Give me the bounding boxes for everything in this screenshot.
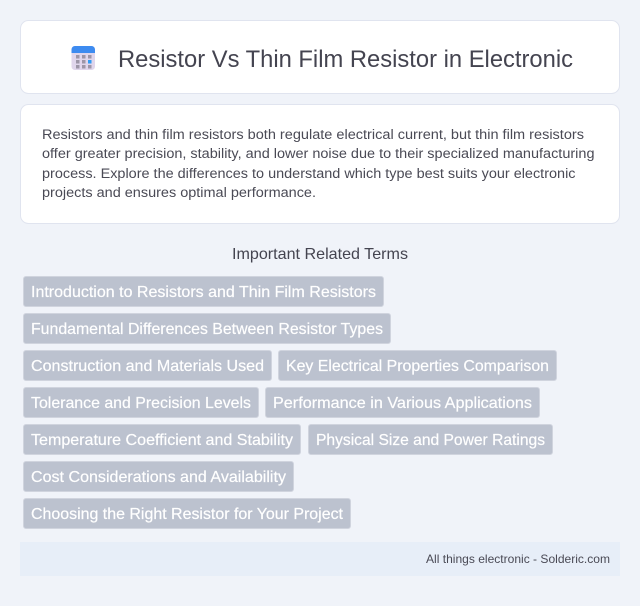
chip: electrical properties [278,350,556,380]
summary text: Resistors and thin film resistors both regulate electrical current, but thin film resistors [42,127,584,143]
chip: tolerance [24,388,258,418]
chip: cost [24,462,294,492]
chip: construction [24,350,272,380]
chip: construction: Construction and Materials Used [31,358,264,375]
term chips [24,276,556,528]
summary text: process. Explore the differences to understand which type best suits your electronic [42,166,576,182]
chip: cost: Cost Considerations and Availability [31,469,286,486]
chip: choosing: Choosing the Right Resistor for Your Project [31,506,344,523]
chip: performance: Performance in Various Applications [273,395,532,412]
chip: introduction: Introduction to Resistors and Thin Film Resistors [31,284,376,301]
summary text: projects and ensures optimal performance. [42,185,316,201]
panel: summary [20,104,620,224]
footer: All things electronic - Solderic.com [426,552,610,566]
chip: temperature: Temperature Coefficient and Stability [31,432,293,449]
chip: size [308,424,552,454]
title: Resistor Vs Thin Film Resistor in Electronic [118,46,573,73]
footer [20,542,620,576]
heading: related terms: Important Related Terms [232,246,408,263]
chip: tolerance: Tolerance and Precision Levels [31,395,251,412]
chip: electrical properties: Key Electrical Properties Comparison [286,358,549,375]
chip: fundamental differences [24,314,390,344]
panel: header [20,20,620,94]
chip: introduction [24,276,384,306]
chip: choosing [24,498,350,528]
icon: calendar [72,46,95,70]
summary text: offer greater precision, stability, and lower noise due to their specialized manufacturing [42,146,594,162]
chip: fundamental differences: Fundamental Differences Between Resistor Types [31,321,383,338]
summary text [42,127,594,201]
chip: performance [266,388,540,418]
chip: temperature [24,424,300,454]
chip: size: Physical Size and Power Ratings [316,432,545,449]
